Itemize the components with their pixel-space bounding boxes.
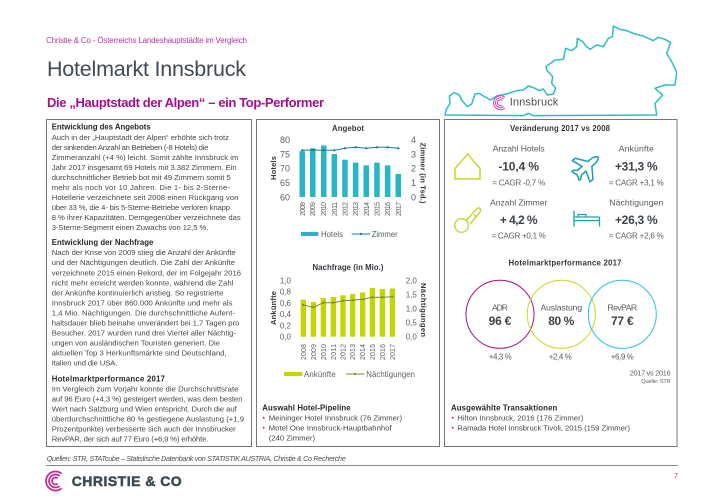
footer logo [46, 471, 182, 490]
text block: Entwicklung des Angebots [52, 122, 241, 232]
bar chart: Nachfrage: 2009 [311, 344, 318, 360]
bar chart: Angebot: 1 [411, 178, 416, 188]
KPI: Anzahl Hotels [492, 144, 545, 187]
bar chart: Angebot: Hotels [269, 156, 278, 180]
text block: Entwicklung des Angebots: der sinkenden Anzahl an Betrieben (-8 Hotels) die [52, 143, 208, 152]
page number: 7 [674, 471, 678, 480]
bar chart: Angebot: 2008 [300, 202, 307, 216]
text block: Entwicklung des Angebots: über 33 %, die 4- bis 5-Sterne-Betriebe verloren knapp [52, 203, 230, 212]
text block: Hotelmarktperformance 2017: auf 96 Euro (+4,3 %) gesteigert werden, was dem besten [52, 394, 242, 404]
icon: key [455, 208, 481, 232]
source line: Quellen: STR, STATcube – Statistische Datenbank von STATISTIK AUSTRIA, Christie & Co Recherche [47, 454, 346, 463]
bar chart: Nachfrage: 0,5 [406, 318, 417, 328]
text block: Hotelmarktperformance 2017: überdurchschnittliche 80 % gestiegene Auslastung (+1,9 [52, 415, 244, 424]
bar chart: Angebot [269, 124, 428, 239]
bar chart: Nachfrage: 2016 [380, 344, 387, 360]
bar chart: Nachfrage: 0,0 [280, 332, 292, 342]
text block: Entwicklung der Nachfrage: der Ankünfte kontinuierlich anstieg. So registrierte [52, 288, 223, 297]
Austria outline [445, 26, 677, 116]
text block: Ausgewählte Transaktionen: Ausgewählte Transaktionen [451, 404, 558, 413]
heading: Veränderung 2017 vs 2008: Veränderung 2017 vs 2008 [510, 124, 611, 133]
panel: charts and pipeline [256, 120, 440, 446]
bar chart: Angebot: 2011 [332, 202, 339, 216]
text block: Auswahl Hotel-Pipeline [262, 404, 402, 443]
bar chart: Nachfrage: 2008 [301, 344, 308, 360]
text block: Hotelmarktperformance 2017 [52, 374, 244, 444]
bar chart: Nachfrage: Ankünfte [269, 291, 278, 325]
text block: Entwicklung der Nachfrage [52, 238, 241, 367]
bar chart: Angebot: 2009 [310, 202, 317, 216]
bar chart: Angebot: Angebot [332, 124, 364, 133]
text block: Hotelmarktperformance 2017: Wert nach Salzburg und Wien entspricht. Durch die auf [52, 405, 238, 414]
text block: Hotelmarktperformance 2017: Hotelmarktperformance 2017 [52, 374, 165, 383]
bar chart: Nachfrage [269, 263, 428, 379]
title: Hotelmarkt Innsbruck [47, 57, 246, 81]
text block: Ausgewählte Transaktionen: Ramada Hotel Innsbruck Tivoli, 2015 (159 Zimmer) [457, 424, 630, 433]
note: comparison period and source: Quelle: STR [641, 379, 671, 385]
text block: Entwicklung der Nachfrage: aktuellen Top 3 Herkunftsmärkte sind Deutschland, [52, 348, 227, 357]
KPI: Anzahl Hotels: = CAGR -0,7 % [492, 178, 545, 187]
text block: Auswahl Hotel-Pipeline: Motel One Innsbruck-Hauptbahnhof [269, 424, 393, 433]
bar chart: Nachfrage: Ankünfte [304, 370, 336, 379]
KPI: Anzahl Hotels: -10,4 % [498, 160, 539, 174]
text block: Ausgewählte Transaktionen: Hilton Innsbruck, 2016 (176 Zimmer) [457, 414, 584, 423]
bar chart: Nachfrage: 1,5 [406, 290, 417, 300]
circle: RevPAR [588, 280, 656, 362]
bar chart: Angebot: 80 [280, 135, 290, 145]
panel: KPIs and transactions [444, 120, 677, 446]
note: comparison period and source [630, 369, 671, 385]
icon: Innsbruck marker [494, 96, 505, 110]
bar chart: Nachfrage: 1,0 [406, 304, 417, 314]
KPI: Anzahl Zimmer [490, 197, 547, 240]
KPI: Nächtigungen: Nächtigungen [609, 197, 664, 207]
bar chart: Angebot: 2014 [364, 202, 371, 216]
bar chart: Nachfrage: 2013 [350, 344, 357, 360]
KPI: Anzahl Zimmer: = CAGR +0,1 % [492, 231, 546, 240]
subtitle: Die „Hauptstadt der Alpen“ – ein Top-Performer [47, 95, 324, 110]
text block: Auswahl Hotel-Pipeline: Meininger Hotel Innsbruck (76 Zimmer) [269, 414, 402, 423]
text block: Entwicklung des Angebots: 8 % ihrer Kapazitäten. Demgegenüber verzeichnete das [52, 213, 241, 222]
circle: Auslastung: 80 % [548, 314, 575, 328]
text block: Entwicklung der Nachfrage: haltsdauer blieb beinahe unverändert bei 1,7 Tagen pro [52, 318, 239, 327]
text block: Entwicklung des Angebots: Hotellerie verzeichnete seit 2008 einen Rückgang von [52, 193, 238, 202]
heading: Hotelmarktperformance 2017: Hotelmarktperformance 2017 [508, 258, 622, 268]
text block: Entwicklung der Nachfrage: nicht mehr erreicht werden konnte, während die Zahl [52, 278, 234, 288]
bar chart: Nachfrage: 2012 [340, 344, 348, 360]
text block: Entwicklung des Angebots: durchschnittlicher Betrieb bot mit 49 Zimmern somit 5 [52, 173, 231, 182]
text block: Hotelmarktperformance 2017: Im Vergleich zum Vorjahr konnte die Durchschnittsrate [52, 384, 238, 393]
text block: Auswahl Hotel-Pipeline: Auswahl Hotel-Pipeline [262, 404, 351, 413]
KPI: Ankünfte: +31,3 % [615, 160, 658, 174]
KPI: Anzahl Zimmer: Anzahl Zimmer [490, 197, 547, 207]
note: comparison period and source: 2017 vs 2016 [630, 369, 671, 378]
text block: Entwicklung des Angebots: Zimmeranzahl (+4 %) leicht. Somit zählte Innsbruck im [52, 153, 238, 162]
text block: Entwicklung der Nachfrage: Nach der Krise von 2009 stieg die Anzahl der Ankünfte [52, 248, 236, 257]
circle: RevPAR: RevPAR [607, 302, 637, 312]
map: Austria outline with Innsbruck marker [445, 26, 677, 116]
bar chart: Angebot: 0 [411, 192, 416, 202]
icon: bed [574, 210, 600, 226]
bar chart: Angebot: 70 [280, 164, 290, 174]
text block: Entwicklung der Nachfrage: Innsbruck 2017 über 860.000 Ankünfte und mehr als [52, 298, 233, 307]
text block: Hotelmarktperformance 2017: Prozentpunkte) verbesserte sich auch der Innsbrucker [52, 425, 236, 434]
map label: Innsbruck [510, 96, 559, 108]
bar chart: Nachfrage: 2,0 [406, 276, 417, 286]
logo wordmark: CHRISTIE & CO [72, 473, 182, 489]
text block: Entwicklung der Nachfrage: Italien und die USA. [52, 358, 117, 367]
icon: plane [567, 146, 607, 187]
bar chart: Nachfrage: 0,4 [280, 310, 292, 319]
KPI: Nächtigungen: +26,3 % [615, 213, 658, 227]
circle: Auslastung [527, 280, 595, 362]
text block: Entwicklung des Angebots: Entwicklung des Angebots [52, 122, 151, 132]
circle: ADR: +4,3 % [489, 353, 512, 362]
circle: Auslastung: Auslastung [540, 302, 582, 312]
bar chart: Angebot: 2012 [342, 202, 350, 216]
icon: logo mark [46, 471, 62, 490]
text block: Entwicklung der Nachfrage: ungen von ausländischen Touristen generiert. Die [52, 338, 220, 348]
bar chart: Nachfrage: Nächtigungen [419, 283, 428, 337]
text block: Entwicklung der Nachfrage: und der Nächtigungen deutlich. Die Zahl der Ankünfte [52, 258, 235, 267]
text block: Hotelmarktperformance 2017: RevPAR, der sich auf 77 Euro (+6,9 %) erhöhte. [52, 435, 208, 444]
bar chart: Angebot: 75 [280, 149, 290, 159]
bar chart: Angebot: Zimmer [372, 230, 398, 239]
circle: ADR: ADR [492, 302, 508, 312]
circle: ADR: 96 € [489, 314, 512, 328]
bar chart: Nachfrage: 0,2 [280, 321, 292, 330]
bar chart: Nachfrage: 1,0 [280, 276, 292, 286]
KPI: Anzahl Hotels: Anzahl Hotels [493, 144, 545, 154]
circle: Auslastung: +2,4 % [549, 353, 572, 362]
bar chart: Angebot: 2010 [321, 202, 328, 216]
bar chart: Nachfrage: 2011 [331, 344, 338, 360]
bar chart: Angebot: Zimmer (in Tsd.) [418, 142, 428, 204]
panel: market text [46, 120, 252, 446]
KPI: Anzahl Zimmer: + 4,2 % [500, 213, 538, 227]
text block: Auswahl Hotel-Pipeline: (240 Zimmer) [269, 434, 315, 443]
text block: Entwicklung des Angebots: Auch in der „Hauptstadt der Alpen“ erhöhte sich trotz [52, 133, 229, 142]
circle: ADR [466, 280, 534, 362]
text block: Entwicklung des Angebots: 3-Sterne-Segment einen Zuwachs von 12,5 %. [52, 223, 208, 232]
text block: Entwicklung des Angebots: Jahr 2017 insgesamt 69 Hotels mit 3.382 Zimmern. Ein [52, 163, 237, 172]
bar chart: Angebot: 60 [280, 192, 290, 202]
bar chart: Angebot: 2017 [396, 202, 403, 216]
bar chart: Angebot: Hotels [321, 230, 343, 239]
KPI: Nächtigungen: = CAGR +2,6 % [609, 231, 664, 240]
bar chart: Angebot: 3 [411, 149, 416, 159]
bar chart: Nachfrage: Nächtigungen [366, 370, 415, 379]
bar chart: Angebot: 4 [411, 135, 416, 145]
bar chart: Nachfrage: 0,0 [406, 332, 417, 342]
bar chart: Nachfrage: Nachfrage (in Mio.) [312, 263, 384, 272]
KPI: Ankünfte [609, 144, 664, 187]
bar chart: Angebot: 2013 [353, 202, 360, 216]
header kicker: Christie & Co - Österreichs Landeshauptstädte im Vergleich [46, 36, 247, 45]
KPI: Ankünfte: Ankünfte [619, 144, 654, 154]
text block: Entwicklung des Angebots: mehr als noch vor 10 Jahren. Die 1- bis 2-Sterne- [52, 183, 230, 192]
bar chart: Angebot: 2 [411, 164, 416, 174]
text block: Entwicklung der Nachfrage: 1,4 Mio. Nächtigungen. Die durchschnittliche Aufent- [52, 308, 235, 318]
icon: house [455, 154, 480, 179]
bar chart: Nachfrage: 2015 [370, 344, 377, 360]
bar chart: Nachfrage: 2010 [321, 344, 328, 360]
bar chart: Angebot: 2015 [374, 202, 382, 216]
circle: RevPAR: 77 € [611, 314, 634, 328]
bar chart: Nachfrage: 2017 [390, 344, 397, 360]
bar chart: Nachfrage: 2014 [360, 344, 367, 360]
text block: Entwicklung der Nachfrage: Besucher. 2017 wurden rund drei Viertel aller Nächtig- [52, 328, 236, 337]
text block: Entwicklung der Nachfrage: verzeichnete 2015 einen Rekord, der im Folgejahr 2016 [52, 268, 241, 278]
text block: Ausgewählte Transaktionen [451, 404, 630, 433]
text block: Entwicklung der Nachfrage: Entwicklung der Nachfrage [52, 238, 154, 247]
bar chart: Nachfrage: 0,8 [280, 288, 292, 297]
bar chart: Nachfrage: 0,6 [280, 299, 292, 308]
circle: RevPAR: +6,9 % [611, 353, 634, 362]
KPI: Nächtigungen [609, 197, 664, 240]
bar chart: Angebot: 2016 [385, 202, 392, 216]
bar chart: Angebot: 65 [280, 178, 290, 188]
KPI: Ankünfte: = CAGR +3,1 % [609, 178, 664, 187]
